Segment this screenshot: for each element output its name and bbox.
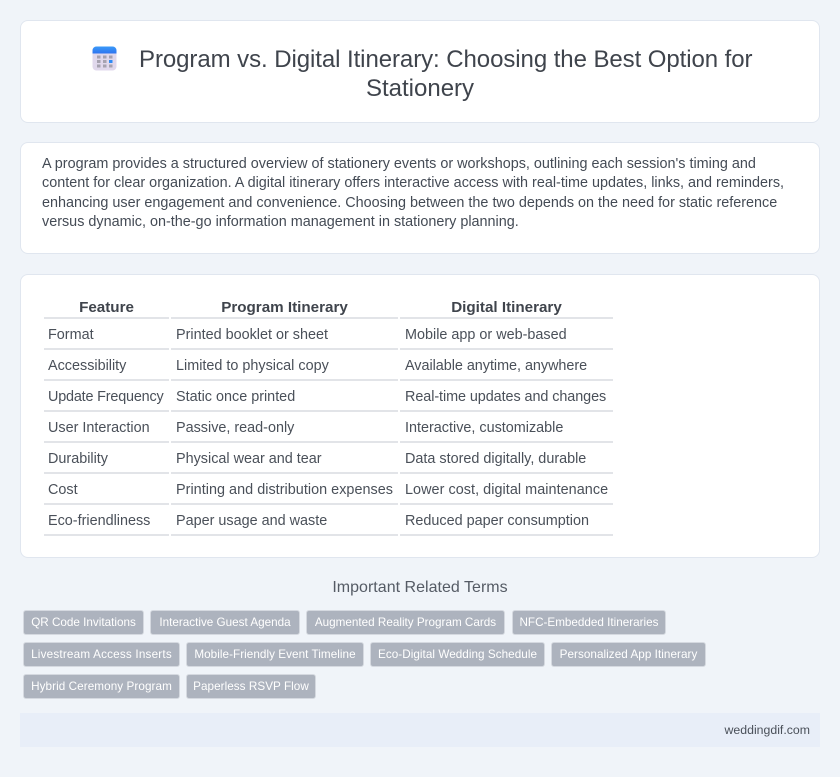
comparison table: Feature (79, 299, 134, 316)
related terms tags: Interactive Guest Agenda (159, 616, 291, 629)
comparison table: Paper usage and waste (176, 513, 327, 529)
panel: header (20, 20, 820, 123)
panel: comparison table (20, 274, 820, 558)
comparison table: Real-time updates and changes (405, 389, 606, 405)
comparison table: Passive, read-only (176, 420, 294, 436)
comparison table: Available anytime, anywhere (405, 358, 587, 374)
panel: intro (20, 142, 820, 254)
comparison table: Lower cost, digital maintenance (405, 482, 608, 498)
comparison table: Printing and distribution expenses (176, 482, 393, 498)
title: Stationery (366, 74, 474, 102)
text block: intro paragraph: versus dynamic, on-the-go information management in stationery planning. (42, 214, 519, 230)
comparison table: User Interaction (48, 420, 150, 436)
comparison table: Update Frequency (48, 389, 164, 405)
comparison table: Durability (48, 451, 108, 467)
comparison table: Data stored digitally, durable (405, 451, 586, 467)
related terms tags: QR Code Invitations (31, 616, 136, 629)
text block: intro paragraph: enhancing user engagement and convenience. Choosing between the two depends on the need for static reference (42, 194, 777, 210)
comparison table: Format (48, 327, 94, 343)
title (139, 46, 752, 102)
related terms tags: Hybrid Ceremony Program (31, 680, 172, 693)
comparison table: Limited to physical copy (176, 358, 329, 374)
footer source text: weddingdif.com (725, 723, 810, 737)
related terms tags: Personalized App Itinerary (560, 648, 697, 661)
comparison table (44, 299, 613, 536)
related terms tags (23, 610, 706, 699)
icon: calendar (92, 46, 116, 70)
text block: intro paragraph (42, 156, 784, 230)
comparison table: Eco-friendliness (48, 513, 150, 529)
comparison table: Cost (48, 482, 78, 498)
comparison table: Digital Itinerary (451, 299, 562, 316)
comparison table: Interactive, customizable (405, 420, 563, 436)
heading: related terms: Important Related Terms (332, 579, 508, 596)
comparison table: Printed booklet or sheet (176, 327, 328, 343)
related terms tags: Livestream Access Inserts (31, 648, 172, 661)
footer (20, 713, 820, 747)
related terms tags: Paperless RSVP Flow (193, 680, 309, 693)
comparison table: Reduced paper consumption (405, 513, 589, 529)
comparison table: Program Itinerary (221, 299, 348, 316)
comparison table: Mobile app or web-based (405, 327, 567, 343)
related terms tags: NFC-Embedded Itineraries (519, 616, 658, 629)
text block: intro paragraph: content for clear organization. A digital itinerary offers interactive access with real-time updates, links, and reminders, (42, 175, 784, 191)
text block: intro paragraph: A program provides a structured overview of stationery events or workshops, outlining each session's timing and (42, 156, 756, 172)
comparison table: Static once printed (176, 389, 295, 405)
related terms tags: Mobile-Friendly Event Timeline (194, 648, 356, 661)
related terms tags: Augmented Reality Program Cards (315, 616, 496, 629)
comparison table: Physical wear and tear (176, 451, 322, 467)
title: Program vs. Digital Itinerary: Choosing the Best Option for (139, 46, 752, 73)
related terms tags: Eco-Digital Wedding Schedule (378, 648, 537, 661)
comparison table: Accessibility (48, 358, 126, 374)
